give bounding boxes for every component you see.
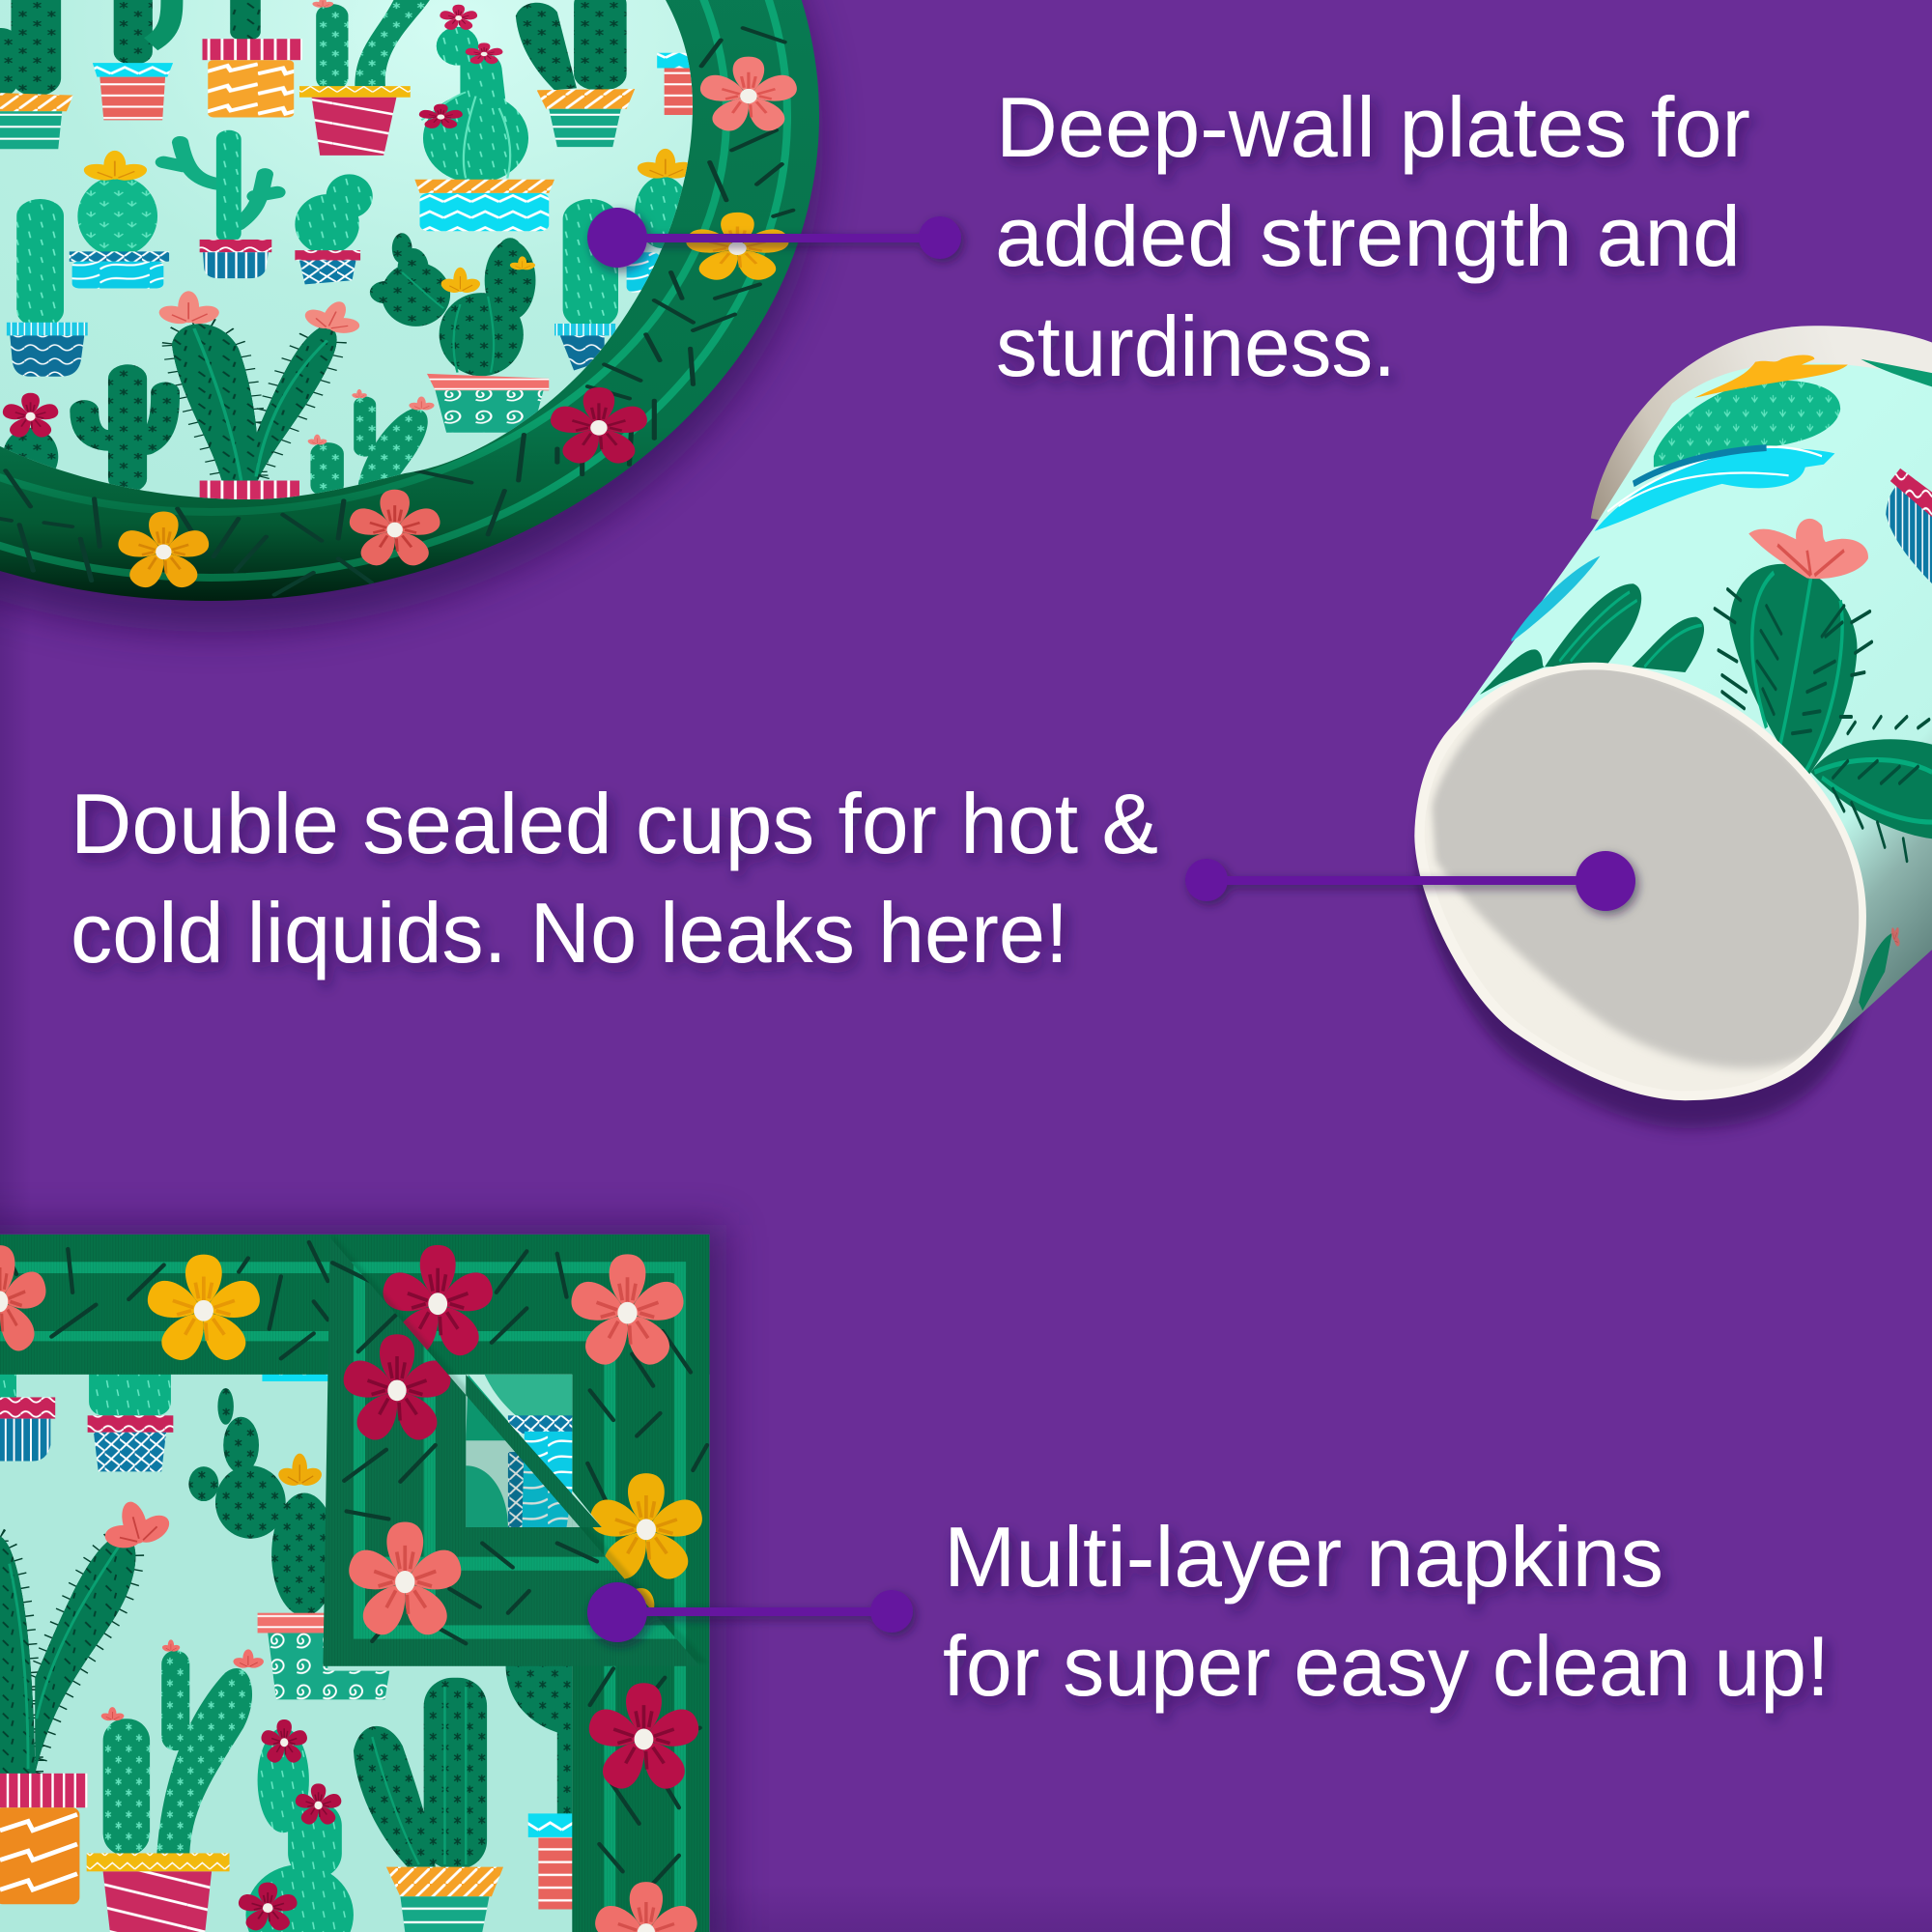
rim flowers	[115, 57, 801, 592]
text: napkins	[943, 1509, 1830, 1714]
text: napkins: Multi-layer napkins	[944, 1509, 1663, 1605]
napkin fold window	[466, 1375, 602, 1527]
napkin top and right border	[0, 1235, 709, 1932]
cactus pot row 1	[0, 0, 430, 156]
big pale cactus	[414, 5, 554, 231]
callout line: napkin	[587, 1582, 913, 1642]
napkin shadow	[0, 1225, 726, 1932]
cup print: round cactus and pot	[1595, 355, 1932, 583]
cup shadow	[1417, 690, 1868, 1128]
cup base rim	[1414, 663, 1866, 1100]
cup print: big cactus	[1480, 519, 1932, 1010]
napkin base	[0, 1235, 709, 1932]
row 2 left cacti	[7, 130, 373, 377]
text: plates	[995, 79, 1750, 394]
cup base disk	[1428, 669, 1859, 1076]
panel: cup	[1407, 326, 1932, 1128]
panel: plate	[0, 0, 823, 632]
text: plates: added strength and	[995, 188, 1741, 284]
folded napkin flap	[319, 1236, 707, 1668]
cup lip	[1591, 326, 1932, 523]
plate rim	[0, 0, 819, 601]
napkin fold shadow	[327, 1234, 707, 1662]
big dark bottom cactus	[1, 291, 436, 500]
plate rim dashes	[0, 28, 793, 595]
callout line: cup	[1185, 851, 1635, 911]
text: cups: cold liquids. No leaks here!	[71, 885, 1068, 980]
panel: napkin	[0, 1225, 726, 1932]
text: plates: sturdiness.	[996, 298, 1396, 394]
right cacti	[516, 0, 697, 371]
callout line: plate	[587, 208, 961, 268]
text: cups: Double sealed cups for hot &	[71, 776, 1158, 871]
cup body	[1452, 363, 1932, 1049]
plate shadow	[0, 0, 823, 632]
text: napkins: for super easy clean up!	[943, 1618, 1830, 1714]
napkin cacti print	[0, 1354, 573, 1932]
rim stripes	[0, 0, 787, 578]
text: cups	[71, 776, 1158, 980]
plate well with cactus pattern	[0, 0, 734, 512]
text: plates: Deep-wall plates for	[996, 79, 1750, 175]
dark multi-pad cactus	[370, 233, 549, 433]
